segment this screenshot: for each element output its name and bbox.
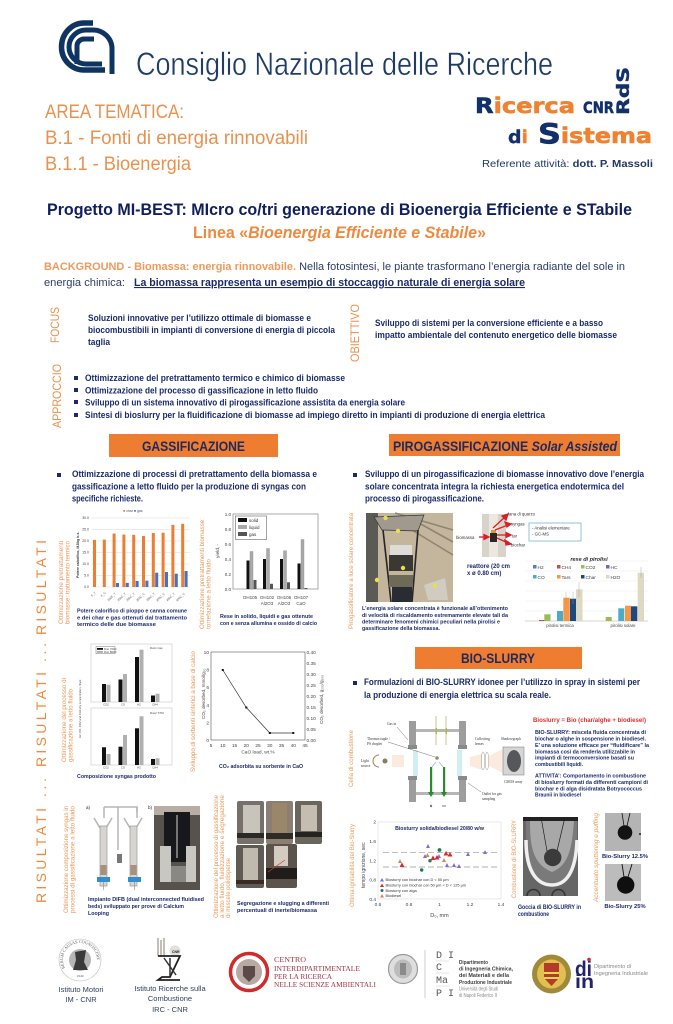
- caption: goccia: combustione: [518, 912, 550, 918]
- label: sputtering e puffing: Accentuato sputtering e puffing: [594, 812, 600, 903]
- chart: tempo ignizione: 1: [438, 902, 441, 908]
- diagram: cella di combustione: Light: [361, 759, 369, 763]
- chart: tempo ignizione: 0.4: [369, 897, 376, 903]
- chart: composizione syngas: Run 800C: [104, 650, 117, 654]
- list: approccio: Sintesi di bioslurry per la fluidificazione di biomasse ad impiego diretto in impianti di produzione di energia elettrica: [85, 410, 546, 421]
- text: gassificazione intro: specifiche richieste.: [72, 494, 143, 504]
- diagram: cella di combustione: Gas in: [387, 722, 396, 726]
- label: fluidizzazione e segregazione: di miscele polidisperse: [226, 857, 232, 918]
- chart: CO2 adsorbita: 20: [244, 743, 249, 749]
- chart: composizione syngas: Run1 Cap: [150, 646, 163, 650]
- chart: rese di pirolisi: CO: [538, 575, 545, 581]
- heading: pirogassificazione: [389, 434, 620, 456]
- chart: rese solidi liquidi gas: solid: [249, 518, 259, 523]
- chart: composizione syngas: Run2 T700: [150, 711, 164, 715]
- text: centro interdipartimentale: CENTRO: [274, 955, 306, 964]
- text: centro interdipartimentale: [274, 955, 376, 989]
- text: bio-slurry description: impianti di termoconversione basati su: [535, 756, 635, 762]
- caption: impianto DIFB: [88, 897, 205, 917]
- photo: goccia in combustione: [523, 817, 578, 896]
- photo: droplet 25%: [605, 864, 641, 901]
- text: bio-slurry description: BIO-SLURRY: miscela fluida concentrata di: [535, 730, 646, 736]
- chart: potere calorifico: 250C_T: [116, 592, 127, 602]
- chart: CO2 adsorbita: 6: [206, 685, 209, 691]
- text: Istituto Motori: IM - CNR: [65, 995, 97, 1004]
- caption: energia solare: L’energia solare concentrata è funzionale all’ottenimento: [362, 606, 509, 612]
- caption: rese: Rese in solido, liquidi e gas ottenute: [220, 614, 313, 620]
- diagram: cella di combustione: Outlet for gas: [482, 792, 502, 796]
- text: centro interdipartimentale: INTERDIPARTIMENTALE: [274, 964, 360, 973]
- chart: CO2 adsorbita: 0.10: [306, 716, 316, 722]
- label: risultati vertical: . . .: [33, 778, 49, 797]
- text: bio-slurry intro: [353, 677, 640, 701]
- label: combustione bio-slurry: Combustione di BIO-SLURRY: [512, 820, 518, 898]
- caption: segregazione: percentuali di inerte/biomassa: [237, 908, 318, 914]
- text: bio-slurry description: combustibili liquidi.: [535, 762, 583, 768]
- chart: potere calorifico: 200F_T: [107, 592, 117, 602]
- heading: area tematica: AREA TEMATICA:: [45, 102, 184, 123]
- label: composizione syngas processi: [64, 805, 76, 913]
- photos: segregazione e slugging: [236, 801, 322, 888]
- chart: composizione syngas: H2: [137, 702, 141, 706]
- label: risultati vertical: RISULTATI: [33, 672, 49, 767]
- icon: CNR logo: [62, 23, 112, 74]
- title: Consiglio Nazionale delle Ricerche: Consiglio Nazionale delle Ricerche: [136, 46, 553, 82]
- chart: potere calorifico: 15.0: [82, 550, 89, 554]
- chart: CO2 adsorbita: 0.40: [306, 650, 316, 656]
- chart: rese solidi liquidi gas: OH107: [294, 595, 309, 600]
- chart: potere calorifico: 300C_T: [145, 592, 156, 602]
- chart: rese di pirolisi: pirolisi solare: [610, 623, 636, 628]
- text: dipartimento ingegneria industriale: Dipartimento di: [594, 964, 631, 970]
- diagram: impianto DIFB: b): [148, 805, 153, 810]
- chart: potere calorifico: 20.0: [82, 539, 89, 543]
- heading: gassificazione: GASSIFICAZIONE: [142, 438, 245, 454]
- logo: Ricerca CNR di Sistema RdS: Ricerca: [475, 94, 575, 118]
- label: pretrattamenti termico: [59, 540, 72, 624]
- chart: tempo ignizione: Biodiesel: [386, 893, 401, 898]
- logo: DICMaPI: C: [436, 963, 442, 974]
- text: Istituto Motori: [58, 985, 104, 1004]
- text: focus: [88, 313, 336, 348]
- label: risultati vertical: RISULTATI: [33, 808, 49, 903]
- chart: potere calorifico: 25.0: [82, 528, 89, 532]
- chart: rese di pirolisi: CO2: [586, 565, 596, 571]
- chart: rese solidi liquidi gas: OH105: [243, 595, 258, 600]
- caption: impianto DIFB: Impianto DIFB (dual interconnected fluidised: [88, 897, 205, 903]
- chart: composizione syngas: [78, 644, 172, 770]
- text: bioslurry equation: Bioslurry = Bio (char/alghe + biodiesel): [533, 717, 646, 724]
- chart: potere calorifico: 200C_T: [125, 592, 136, 602]
- logo: Ricerca CNR di Sistema RdS: di: [508, 127, 528, 148]
- caption: energia solare: di velocità di riscaldamento estremamente elevate tali da: [362, 613, 509, 619]
- chart: potere calorifico: ■ char ■ gas: [123, 509, 143, 513]
- chart: potere calorifico: 0.0: [84, 585, 89, 589]
- chart: potere calorifico: 30.0: [82, 516, 89, 520]
- text: bio-slurry intro: la produzione di energia elettrica su scala reale.: [364, 690, 551, 701]
- chart: rese solidi liquidi gas: yield, -: [215, 543, 221, 558]
- chart: rese solidi liquidi gas: 0.6: [225, 542, 231, 547]
- chart: rese solidi liquidi gas: OH106: [277, 595, 292, 600]
- text: dipartimento DICMaPI: di Ingegneria Chimica,: [459, 966, 514, 972]
- label: risultati vertical: . . .: [33, 643, 49, 662]
- text: bio-slurry description: biochar o alghe in sospensione in biodiesel.: [535, 736, 646, 742]
- chart: rese di pirolisi: H2: [538, 565, 544, 571]
- text: bio-slurry description: biomassa così da renderla utilizzabile in: [535, 749, 636, 755]
- chart: CO2 adsorbita: 45: [302, 743, 308, 749]
- chart: rese di pirolisi: H2O: [610, 575, 621, 581]
- text: bio-slurry description: E’ una soluzione efficace per “fluidificare” la: [535, 743, 650, 749]
- heading: area tematica: B.1 - Fonti di energia rinnovabili: [45, 128, 308, 149]
- label: torrefazione: [200, 518, 212, 629]
- diagram: reattore: [456, 512, 581, 557]
- chart: rese solidi liquidi gas: 0.0: [225, 587, 231, 592]
- caption: reattore: [467, 564, 510, 577]
- chart: rese solidi liquidi gas: [215, 512, 318, 606]
- chart: rese solidi liquidi gas: 0.2: [225, 572, 231, 577]
- heading: area tematica: [45, 102, 308, 175]
- diagram: reattore: biomassa: [456, 535, 475, 540]
- text: dipartimento DICMaPI: dei Materiali e della: [459, 973, 509, 979]
- chart: rese solidi liquidi gas: 0.4: [225, 557, 231, 562]
- text: bio-slurry description: biochar e di alga disidratata Botryococcus: [535, 786, 642, 792]
- chart: CO2 adsorbita: 0.15: [306, 705, 316, 711]
- logo: Istituto Motori seal: RERUM CAUSAS COGNOSCERE: [60, 940, 100, 969]
- chart: CO2 adsorbita: 25: [255, 743, 261, 749]
- heading: bio-slurry: BIO-SLURRY: [461, 650, 536, 666]
- caption: segregazione: Segregazione e slugging a differenti: [237, 901, 329, 907]
- caption: CO2 adsorbita: CO₂ adsorbita su sorbente in CaO: [219, 764, 304, 770]
- logo: DIIN: [575, 958, 594, 993]
- text: background: La biomassa rappresenta un esempio di stoccaggio naturale di energia solare: [134, 277, 525, 289]
- chart: rese solidi liquidi gas: OH102: [260, 595, 275, 600]
- chart: CO2 adsorbita: 30: [267, 743, 273, 749]
- chart: potere calorifico: 400C_T: [165, 592, 176, 602]
- label: sorbenti: Sviluppo di sorbenti sintetici a base di calcio: [191, 650, 197, 772]
- logo: IRC: CNR: [172, 950, 180, 954]
- logo: DICMaPI: P I: [436, 989, 454, 1000]
- caption: composizione syngas: Composizione syngas prodotto: [77, 774, 157, 780]
- label: processo letto fluido: Ottimizzazione del processo di: [62, 678, 68, 762]
- diagram: cella di combustione: source: [361, 764, 371, 768]
- chart: CO2 adsorbita: 4: [206, 703, 209, 709]
- label: processo letto fluido: [62, 678, 74, 762]
- label: cella di combustione: Cella di combustione: [349, 729, 355, 787]
- chart: composizione syngas: H2: [137, 766, 141, 770]
- chart: tempo ignizione: 1.2: [369, 858, 376, 864]
- text: gassificazione intro: [57, 469, 317, 504]
- label: fluidizzazione e segregazione: a letto fluido, fluidizzazione e segregazione: [220, 794, 226, 918]
- logo: DIIN: in: [575, 972, 594, 993]
- text: obiettivo: [375, 318, 617, 341]
- chart: composizione syngas: CH4: [152, 702, 158, 706]
- text: IRC: [134, 984, 206, 1014]
- label: approccio: APPROCCIO: [50, 364, 64, 428]
- chart: rese di pirolisi: CH4: [562, 565, 571, 571]
- text: referente attività: Referente attività: dott. P. Massoli: [482, 158, 653, 170]
- caption: potere calorifico: Potere calorifico di pioppo e canna comune: [77, 608, 187, 614]
- logo: Ricerca CNR di Sistema RdS: RdS: [614, 67, 634, 115]
- caption: energia solare: determinare fenomeni chimici peculiari nella pirolisi e: [362, 620, 500, 626]
- caption: reattore: reattore (20 cm: [467, 564, 510, 570]
- caption: goccia: [518, 905, 581, 918]
- logo: DICMaPI: D I: [436, 951, 454, 962]
- logo: red seal: [230, 954, 268, 990]
- chart: tempo ignizione: Biosturry con alga: [386, 888, 417, 893]
- label: risultati vertical: RISULTATI: [33, 540, 49, 635]
- label: ottima ignitabilità: Ottima ignitabilità del Bio-Slurry: [350, 824, 356, 907]
- chart: rese di pirolisi: rese di pirolisi: [570, 557, 608, 563]
- chart: composizione syngas: CO: [121, 702, 126, 706]
- diagram: cella di combustione: Shadowgraph: [501, 737, 521, 741]
- chart: CO2 adsorbita: 0.25: [306, 683, 316, 689]
- logo: yellow seal: [532, 954, 571, 994]
- text: pirogassificazione intro: solare concentrata integra la richiesta energetica endotermica del: [365, 482, 624, 492]
- text: dipartimento DICMaPI: Produzione Industriale: [459, 980, 512, 986]
- label: torrefazione: torrefazione a letto fluido: [206, 558, 212, 629]
- caption: impianto DIFB: beds) sviluppato per prove di Calcium: [88, 904, 184, 910]
- list: approccio: [74, 373, 546, 421]
- label: composizione syngas processi: processi di gassificazione a letto fluido: [70, 805, 76, 913]
- chart: CO2 adsorbita: 10: [220, 743, 226, 749]
- text: centro interdipartimentale: NELLE SCIENZE AMBIENTALI: [274, 980, 376, 989]
- logo: Ricerca CNR di Sistema RdS: CNR: [583, 98, 614, 117]
- photo: droplet 12.5%: [605, 813, 641, 851]
- chart: CO2 adsorbita: 8: [206, 668, 209, 674]
- caption: potere calorifico: e dei char e gas ottenuti dal trattamento: [77, 615, 188, 621]
- chart: potere calorifico: 400C_C: [175, 591, 186, 602]
- chart: tempo ignizione: 1.4: [498, 902, 505, 908]
- label: torrefazione: Ottimizzazione pretrattamenti biomasse:: [200, 518, 206, 629]
- text: bio-slurry description: ATTIVITA’: Comportamento in combustione: [535, 774, 646, 780]
- text: focus: taglia: [88, 337, 111, 348]
- label: pirogassificatore: Pirogassificatore a luce solare concentrata: [349, 512, 355, 629]
- chart: CO2 adsorbita: 10: [204, 650, 209, 656]
- caption: energia solare: [362, 606, 509, 632]
- label: pretrattamenti termico: Ottimizzazione pretrattamenti: [59, 541, 65, 624]
- chart: CO2 adsorbita: 0.30: [306, 672, 316, 678]
- chart: tempo ignizione: Biosturry con biochar con 50 μm < D < 125 μm: [386, 882, 466, 888]
- label: processo letto fluido: gassificazione a letto fluido: [68, 688, 74, 762]
- list: approccio: Ottimizzazione del pretrattamento termico e chimico di biomasse: [85, 373, 345, 384]
- chart: CO2 adsorbita: 5: [210, 743, 213, 749]
- chart: CO2 adsorbita: 15: [232, 743, 237, 749]
- text: obiettivo: impatto ambientale del contenuto energetico delle biomasse: [375, 330, 617, 341]
- chart: composizione syngas: Run 700C: [104, 647, 117, 651]
- chart: rese di pirolisi: [525, 557, 648, 628]
- text: Istituto Motori: Istituto Motori: [58, 985, 104, 994]
- chart: tempo ignizione: 0.8: [369, 878, 376, 884]
- text: obiettivo: Sviluppo di sistemi per la conversione efficiente e a basso: [375, 318, 603, 329]
- label: fluidizzazione e segregazione: Ottimizzazione del processo di gassificazione: [214, 794, 220, 918]
- label: obiettivo: OBIETTIVO: [348, 304, 362, 362]
- chart: composizione syngas: CH4: [152, 766, 158, 770]
- chart: CO2 adsorbita: 0.20: [306, 694, 316, 700]
- chart: CO2 adsorbita: 2: [206, 720, 209, 726]
- heading: project title: Progetto MI-BEST: MIcro co/tri generazione di Bioenergia Efficiente e STabile: [47, 201, 632, 219]
- chart: tempo ignizione: 0.8: [406, 902, 413, 908]
- logo: IRC: [158, 938, 180, 980]
- chart: tempo ignizione: 2: [373, 820, 376, 826]
- chart: rese solidi liquidi gas: Al2O3: [261, 601, 274, 606]
- chart: potere calorifico: F_C: [100, 590, 107, 598]
- chart: composizione syngas: H2, CO, CO2 and CH4 dry concentration, %vol: [78, 679, 82, 738]
- logo: Ricerca CNR di Sistema RdS: Sistema: [538, 117, 652, 150]
- chart: CO2 adsorbita: 0.05: [306, 727, 316, 733]
- logo: DIIN: di: [575, 958, 592, 981]
- diagram: cella di combustione: [361, 716, 524, 807]
- text: background: energia chimica:: [44, 277, 125, 289]
- text: dipartimento DICMaPI: di Napoli Federico II: [459, 993, 497, 999]
- logo: DICMaPI: [425, 950, 454, 1000]
- label: fluidizzazione e segregazione: [214, 794, 232, 918]
- chart: tempo ignizione: Biosturry con biochar con D < 50 μm: [386, 877, 449, 882]
- caption: potere calorifico: [77, 608, 188, 628]
- text: gassificazione intro: Ottimizzazione di processi di pretrattamento della biomassa e: [72, 469, 317, 480]
- chart: rese di pirolisi: HC: [610, 565, 618, 571]
- chart: tempo ignizione: Biosturry solida/biodiesel 20/80 w/w: [395, 826, 485, 832]
- chart: composizione syngas: CO: [121, 766, 126, 770]
- chart: rese di pirolisi: Tars: [562, 575, 571, 581]
- chart: potere calorifico: Potere calorifico, MJ/kg b.s.: [76, 532, 80, 578]
- caption: goccia: Goccia di BIO-SLURRY in: [518, 905, 581, 911]
- text: focus: Soluzioni innovative per l’utilizzo ottimale di biomasse e: [88, 313, 311, 324]
- diagram: cella di combustione: CMOS array: [504, 780, 523, 784]
- text: dipartimento DICMaPI: [459, 960, 514, 999]
- caption: rese: con e senza allumina e ossido di calcio: [220, 621, 318, 627]
- chart: rese di pirolisi: pirolisi termica: [546, 623, 574, 628]
- logo: Ricerca CNR di Sistema RdS: [475, 67, 652, 150]
- diagram: cella di combustione: sampling: [482, 797, 495, 801]
- chart: CO2 adsorbita: CaO load, wt.%: [241, 750, 275, 756]
- chart: potere calorifico: F_T: [90, 591, 97, 597]
- chart: potere calorifico: 10.0: [82, 562, 89, 566]
- chart: tempo ignizione: 1.2: [467, 902, 474, 908]
- text: IRC: Combustione: [148, 994, 192, 1003]
- text: dipartimento ingegneria industriale: Ingegneria Industriale: [594, 971, 648, 977]
- diagram: cella di combustione: Thermocouple /: [367, 737, 390, 741]
- photo: pirogassificatore: [366, 513, 453, 602]
- label: focus: FOCUS: [48, 307, 62, 343]
- caption: potere calorifico: termico delle due biomasse: [77, 622, 156, 628]
- diagram: impianto DIFB: a): [86, 805, 91, 810]
- chart: tempo ignizione: [361, 820, 505, 919]
- diagram: reattore: - Analisi elementare: [532, 526, 570, 530]
- chart: rese di pirolisi: Char: [586, 575, 596, 581]
- text: dipartimento DICMaPI: Università degli Studi: [459, 986, 498, 992]
- chart: composizione syngas: CO2: [103, 766, 109, 770]
- diagram: cella di combustione: lenses: [475, 742, 484, 746]
- chart: rese solidi liquidi gas: CaO: [296, 601, 306, 606]
- text: gassificazione intro: gassificazione a letto fluido per la produzione di syngas con: [72, 482, 306, 492]
- chart: rese solidi liquidi gas: liquid: [249, 525, 260, 530]
- caption: rese: [220, 614, 318, 627]
- chart: potere calorifico: 250C_C: [135, 591, 146, 602]
- caption: segregazione: [237, 901, 329, 914]
- diagram: cella di combustione: PS droplet: [367, 742, 382, 746]
- heading: pirogassificazione: PIROGASSIFICAZIONE Solar Assisted: [393, 438, 617, 454]
- chart: rese solidi liquidi gas: 1.0: [225, 512, 231, 517]
- caption: 25%: Bio-Slurry 25%: [604, 904, 646, 910]
- chart: rese solidi liquidi gas: gas: [249, 532, 257, 537]
- chart: CO2 adsorbita: 0.00: [306, 738, 316, 744]
- caption: reattore: x ø 0.80 cm): [467, 571, 501, 577]
- diagram: reattore: biochar: [511, 542, 526, 548]
- chart: tempo ignizione: 1.6: [369, 839, 376, 845]
- diagram: reattore: - GC-MS: [532, 532, 549, 536]
- caption: impianto DIFB: Looping: [88, 911, 110, 917]
- text: pirogassificazione intro: processo di pirogassificazione.: [365, 494, 484, 504]
- text: IRC: IRC - CNR: [152, 1005, 188, 1014]
- chart: rese solidi liquidi gas: Al2O3: [278, 601, 291, 606]
- diagram: reattore: lana di quarzo: [508, 512, 536, 516]
- chart: potere calorifico: [76, 509, 190, 602]
- text: dipartimento ingegneria industriale: [594, 964, 648, 977]
- logo: Federico II seal: [388, 954, 418, 984]
- logo: Istituto Motori seal: 1940: [76, 974, 84, 978]
- label: pretrattamenti termico: biomasse: trattamento termico: [66, 540, 72, 624]
- chart: rese solidi liquidi gas: 0.8: [225, 527, 231, 532]
- chart: CO2 adsorbita: 0.35: [306, 661, 316, 667]
- text: background: [44, 261, 625, 289]
- chart: composizione syngas: CO2: [103, 702, 109, 706]
- chart: potere calorifico: 300C_C: [155, 591, 166, 602]
- heading: bio-slurry: [415, 647, 582, 669]
- text: bio-slurry description: Braunii in biodiesel: [535, 793, 581, 799]
- chart: CO2 adsorbita: CO₂ desorbed, mmol/g₂₀: [201, 668, 206, 719]
- logo: Istituto Motori seal: [58, 938, 102, 982]
- diagram: cella di combustione: Collecting: [475, 737, 490, 741]
- photo: impianto DIFB: [154, 806, 200, 890]
- text: bio-slurry description: [535, 730, 650, 799]
- list: approccio: Ottimizzazione del processo di gassificazione in letto fluido: [85, 386, 318, 396]
- logo: DICMaPI: Ma: [436, 976, 448, 987]
- text: pirogassificazione intro: [353, 469, 645, 504]
- text: bio-slurry description: di bioslurry formati da differenti campioni di: [535, 780, 648, 786]
- chart: potere calorifico: 5.0: [84, 574, 89, 578]
- chart: CO2 adsorbita: CO₂ desorbed, g₂₀₂/g₂₀₀: [319, 675, 324, 724]
- text: background: BACKGROUND - Biomassa: energia rinnovabile. Nella fotosintesi, le piante trasformano l’energia radiante del sole in: [44, 261, 625, 273]
- chart: tempo ignizione: 0.6: [375, 902, 382, 908]
- caption: 12.5%: Bio-Slurry 12.5%: [602, 854, 648, 860]
- label: risultati vertical: [33, 540, 49, 903]
- label: composizione syngas processi: Ottimizzazione composizione syngas in: [64, 806, 70, 913]
- chart: tempo ignizione: tempo ignizione, sec: [361, 842, 367, 888]
- text: centro interdipartimentale: PER LA RICERCA: [274, 972, 332, 981]
- chart: CO2 adsorbita: 35: [279, 743, 284, 749]
- heading: linea: Linea «Bioenergia Efficiente e Stabile»: [193, 224, 486, 242]
- chart: CO2 adsorbita: [201, 650, 324, 756]
- text: IRC: Istituto Ricerche sulla: [134, 984, 206, 993]
- chart: CO2 adsorbita: 40: [291, 743, 296, 749]
- chart: tempo ignizione: D₀, mm: [430, 913, 449, 919]
- text: focus: biocombustibili in impianti di conversione di energia di piccola: [88, 325, 336, 336]
- caption: energia solare: gassificazione della biomassa.: [362, 626, 440, 632]
- diagram: impianto DIFB: [86, 805, 153, 890]
- diagram: reattore: syngas: [511, 522, 525, 526]
- diagram: reattore: tar: [512, 534, 518, 538]
- list: approccio: Sviluppo di un sistema innovativo di pirogassificazione assistita da energia solare: [85, 398, 405, 408]
- heading: gassificazione: [109, 434, 278, 457]
- heading: area tematica: B.1.1 - Bioenergia: [45, 154, 191, 175]
- text: dipartimento DICMaPI: Dipartimento: [459, 960, 488, 966]
- chart: CO2 adsorbita: 0: [206, 738, 209, 744]
